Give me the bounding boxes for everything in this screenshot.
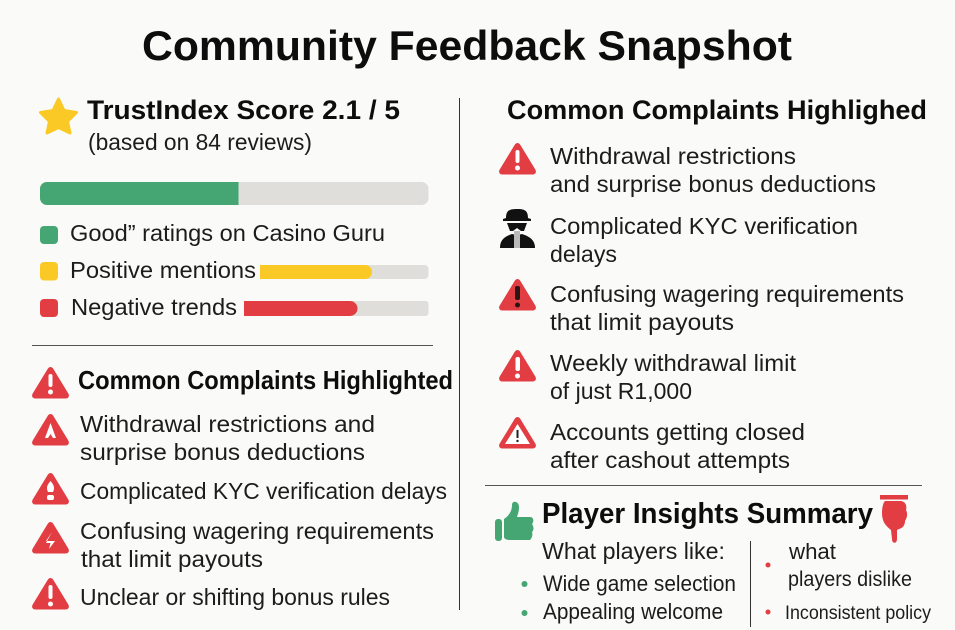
- column: likes: [522, 538, 736, 624]
- legend: negative trends: [40, 294, 428, 320]
- item: wagering: Confusing wagering requirements: [550, 281, 904, 307]
- column: likes: What players like:: [542, 538, 725, 564]
- item: wagering: that limit payouts: [550, 309, 734, 335]
- legend: positive mentions: Positive mentions: [70, 257, 256, 283]
- icon: thumbs up: [495, 502, 534, 541]
- item: wagering: Confusing wagering requirements: [80, 518, 434, 544]
- item: KYC with spy icon: [500, 209, 858, 267]
- item: withdrawal: surprise bonus deductions: [80, 439, 365, 465]
- item: KYC with spy icon: Complicated KYC verification: [550, 213, 858, 239]
- panel: player insights: [495, 495, 931, 627]
- column: dislikes: players dislike: [788, 568, 912, 591]
- title: Community Feedback Snapshot: [142, 22, 792, 69]
- panel: trust score: [40, 95, 428, 320]
- item: weekly limit: Weekly withdrawal limit: [550, 350, 797, 376]
- column: dislikes: [766, 539, 931, 624]
- item: KYC: Complicated KYC verification delays: [80, 478, 447, 504]
- icon: alert heading: [32, 367, 69, 398]
- column: dislikes: what: [788, 539, 836, 564]
- legend: good ratings: Good” ratings on Casino Guru: [70, 220, 385, 246]
- item: withdrawal: [32, 411, 375, 465]
- item: withdrawal: and surprise bonus deductions: [550, 171, 876, 197]
- item: weekly limit: of just R1,000: [550, 378, 692, 404]
- item: withdrawal: Withdrawal restrictions and: [80, 411, 375, 437]
- icon: spy: [500, 209, 535, 248]
- legend: positive mentions: [40, 257, 428, 283]
- icon: thumbs down: [880, 495, 908, 543]
- item: withdrawal: [499, 143, 876, 197]
- column: likes: Wide game selection: [543, 571, 736, 596]
- item: withdrawal: Withdrawal restrictions: [550, 143, 796, 169]
- item: closed accounts: [499, 417, 805, 473]
- item: KYC with spy icon: delays: [550, 241, 617, 267]
- item: wagering: [32, 518, 434, 572]
- score heading: TrustIndex Score 2.1 / 5: [87, 95, 400, 125]
- heading: Player Insights Summary: [542, 498, 873, 530]
- column: likes: Appealing welcome: [543, 599, 723, 624]
- score bar: [40, 182, 428, 205]
- item: wagering: [499, 279, 904, 335]
- column: dislikes: Inconsistent policy: [785, 603, 931, 624]
- heading: Common Complaints Highlighted: [78, 365, 453, 395]
- legend: negative trends: Negative trends: [71, 294, 237, 320]
- heading: Common Complaints Highlighed: [507, 95, 927, 125]
- item: closed accounts: after cashout attempts: [550, 447, 790, 473]
- icon: star: [40, 99, 76, 133]
- panel: complaints right: [499, 95, 927, 473]
- panel: complaints left: [32, 365, 453, 610]
- item: weekly limit: [499, 350, 797, 404]
- item: wagering: that limit payouts: [81, 546, 263, 572]
- item: bonus rules: Unclear or shifting bonus rules: [80, 584, 390, 610]
- review count: (based on 84 reviews): [88, 129, 312, 155]
- item: closed accounts: Accounts getting closed: [550, 419, 805, 445]
